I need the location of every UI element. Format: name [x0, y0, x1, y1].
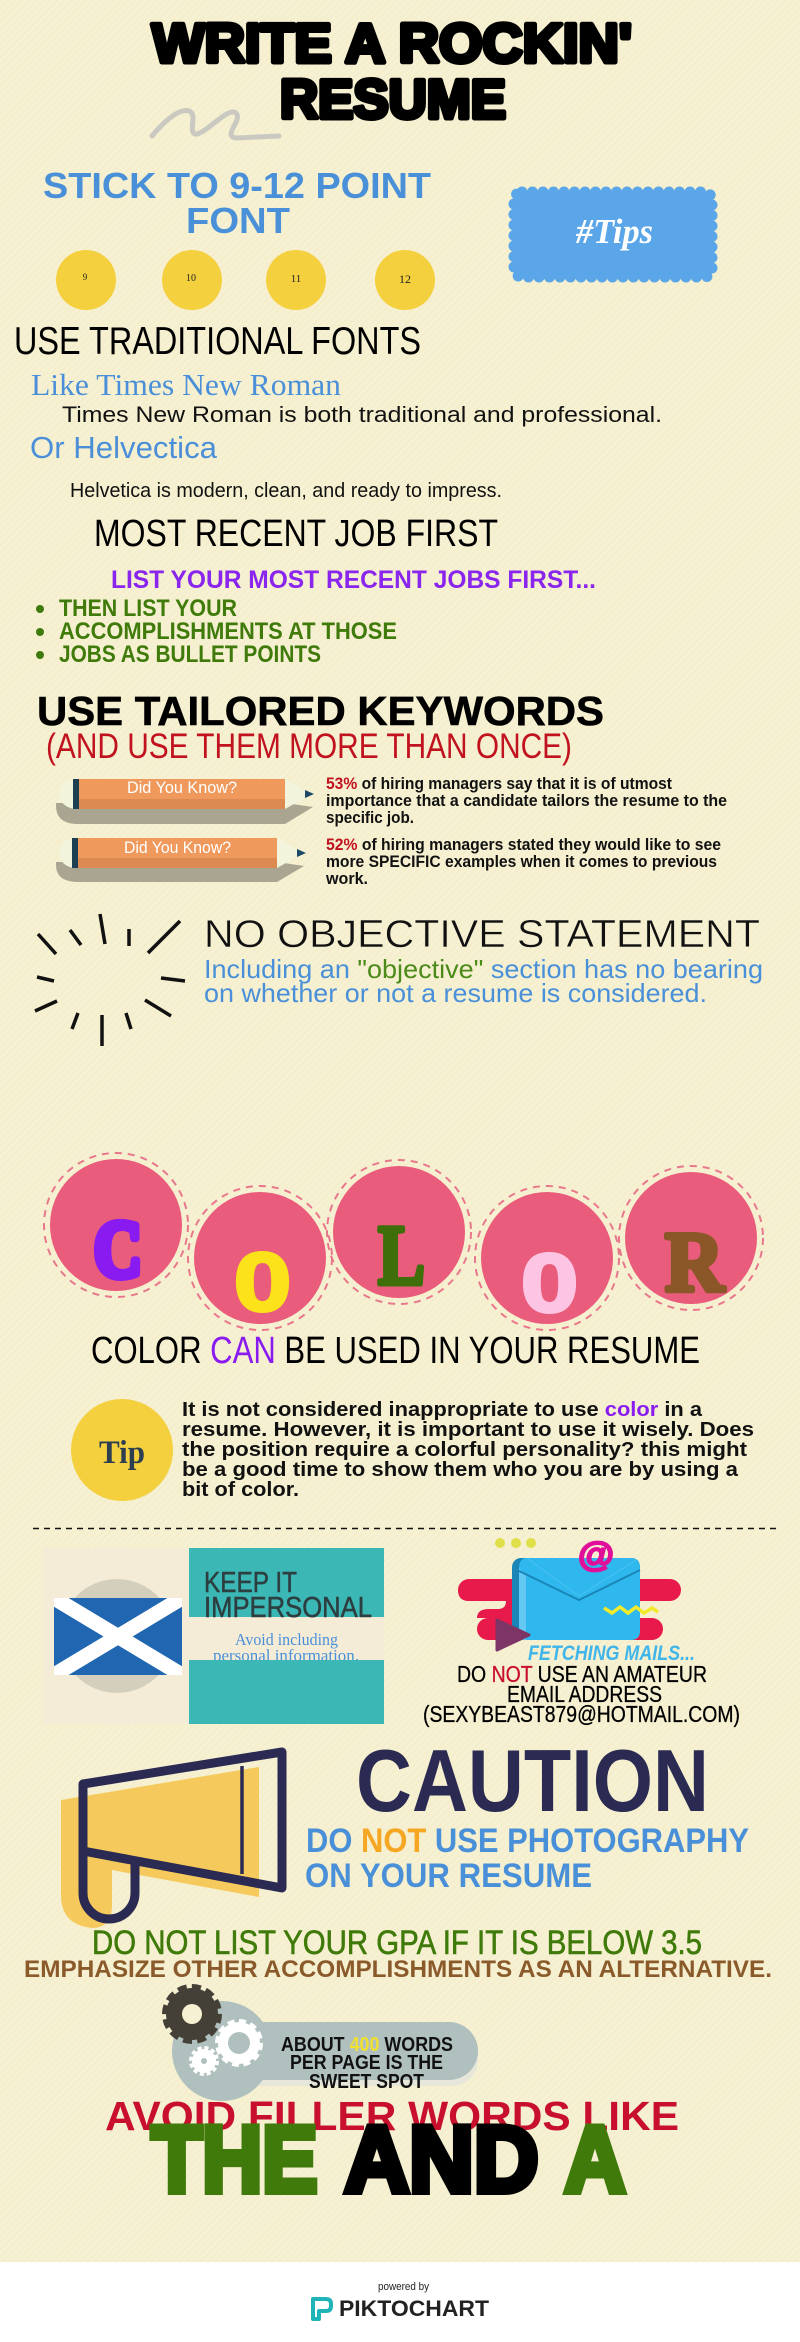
helvetica description: Helvetica is modern, clean, and ready to impress.: [70, 480, 502, 502]
tip paragraph: the position require a colorful personality? this might: [182, 1439, 747, 1461]
font size circles: 11: [291, 273, 301, 285]
filler words: [152, 2106, 626, 2212]
font size circles: 10: [186, 273, 196, 284]
word count text: SWEET SPOT: [309, 2071, 424, 2093]
color letters: O: [236, 1238, 289, 1326]
panel: keep it impersonal: KEEP IT: [204, 1567, 297, 1599]
footer: powered by: [378, 2281, 429, 2293]
color circles: [44, 1153, 763, 1330]
title: RESUME: [280, 68, 506, 130]
filler words: THE: [152, 2106, 318, 2212]
tip paragraph: bit of color.: [182, 1479, 299, 1501]
fact 1: [326, 774, 727, 827]
heading: no objective statement: NO OBJECTIVE STATEMENT: [204, 913, 760, 956]
color letters: C: [94, 1206, 142, 1294]
email advice: DO NOT USE AN AMATEUR: [457, 1661, 707, 1687]
fact 2: work.: [325, 869, 368, 888]
fact 1: specific job.: [326, 808, 414, 827]
heading: font size: STICK TO 9-12 POINT: [43, 165, 431, 206]
heading: font size: FONT: [186, 200, 290, 241]
tip paragraph: resume. However, it is important to use it wisely. Does: [182, 1419, 754, 1441]
footer: [0, 2262, 800, 2342]
color letters: R: [665, 1214, 725, 1310]
font size circles: 12: [399, 272, 411, 286]
heading: most recent job: MOST RECENT JOB FIRST: [94, 513, 498, 555]
icon: sunburst: [35, 914, 185, 1046]
times new roman description: Times New Roman is both traditional and professional.: [62, 402, 662, 427]
panel: keep it impersonal: personal information.: [213, 1646, 359, 1665]
color letters: [94, 1206, 725, 1327]
pencil 1: Did You Know?: [127, 778, 237, 797]
icon: gears key: [165, 1987, 478, 2101]
photography warning: DO NOT USE PHOTOGRAPHY: [306, 1822, 749, 1860]
panel: keep it impersonal: [43, 1548, 384, 1724]
purple sub-heading: LIST YOUR MOST RECENT JOBS FIRST...: [111, 566, 596, 594]
color letters: L: [378, 1207, 425, 1303]
heading: caution: CAUTION: [356, 1731, 709, 1830]
objective description: on whether or not a resume is considered.: [204, 978, 707, 1008]
heading: font size: [43, 165, 431, 241]
bullet list: THEN LIST YOUR: [59, 595, 237, 622]
panel: keep it impersonal: Avoid including: [235, 1630, 338, 1649]
word count text: ABOUT 400 WORDS: [281, 2034, 453, 2056]
icon: flag: [54, 1598, 182, 1675]
tips badge: #Tips: [575, 212, 653, 251]
icon: megaphone: [61, 1752, 282, 1928]
fact 2: 52% of hiring managers stated they would like to see: [326, 835, 721, 854]
bullet list: JOBS AS BULLET POINTS: [59, 641, 321, 668]
filler words heading: AVOID FILLER WORDS LIKE: [105, 2093, 679, 2139]
email advice: (SEXYBEAST879@HOTMAIL.COM): [423, 1701, 740, 1727]
helvetica line: Or Helvectica: [30, 430, 218, 465]
piktochart logo: [313, 2299, 331, 2319]
color letters: O: [523, 1239, 576, 1327]
icon: email envelope: @: [578, 1536, 614, 1574]
fact 1: importance that a candidate tailors the resume to the: [326, 791, 727, 810]
heading: tailored keywords: USE TAILORED KEYWORDS: [37, 688, 604, 734]
bullet list: ACCOMPLISHMENTS AT THOSE: [59, 618, 397, 645]
pencil 1: [56, 778, 314, 824]
filler words: AND: [344, 2106, 538, 2212]
icon: email envelope: [458, 1536, 681, 1650]
font size circles: 9: [83, 272, 88, 282]
fact 1: 53% of hiring managers say that it is of utmost: [326, 774, 672, 793]
word count text: [281, 2034, 453, 2093]
objective description: [204, 954, 763, 1008]
title: [152, 12, 632, 130]
tip paragraph: [182, 1399, 754, 1501]
pencil 2: [56, 838, 306, 882]
red sub-heading: (AND USE THEM MORE THAN ONCE): [46, 727, 572, 766]
squiggle decoration: [152, 111, 279, 138]
fetching mails label: FETCHING MAILS...: [528, 1642, 695, 1665]
font size circles: [56, 250, 435, 310]
pencil 2: Did You Know?: [124, 838, 231, 857]
gpa heading: DO NOT LIST YOUR GPA IF IT IS BELOW 3.5: [92, 1924, 702, 1962]
photography warning: [305, 1822, 749, 1895]
email advice: EMAIL ADDRESS: [507, 1681, 662, 1707]
gpa sub-heading: EMPHASIZE OTHER ACCOMPLISHMENTS AS AN ALTERNATIVE.: [24, 1956, 772, 1983]
fact 2: [325, 835, 721, 888]
email advice: [423, 1661, 740, 1727]
times new roman line: Like Times New Roman: [31, 367, 342, 402]
bullet list: [36, 595, 397, 668]
word count text: PER PAGE IS THE: [290, 2052, 443, 2074]
photography warning: ON YOUR RESUME: [305, 1857, 592, 1895]
footer: PIKTOCHART: [339, 2296, 490, 2321]
tip paragraph: It is not considered inappropriate to use color in a: [182, 1399, 703, 1421]
filler words: A: [564, 2106, 626, 2212]
title: WRITE A ROCKIN': [152, 12, 632, 74]
panel: keep it impersonal: IMPERSONAL: [204, 1592, 372, 1624]
objective description: Including an "objective" section has no bearing: [204, 954, 763, 984]
heading: traditional fonts: USE TRADITIONAL FONTS: [14, 320, 421, 363]
tips badge: [514, 192, 712, 277]
tip badge: [71, 1399, 173, 1501]
tip paragraph: be a good time to show them who you are by using a: [182, 1459, 739, 1481]
fact 2: more SPECIFIC examples when it comes to previous: [326, 852, 717, 871]
tip badge: Tip: [99, 1435, 145, 1471]
heading: color can be used: COLOR CAN BE USED IN YOUR RESUME: [91, 1330, 700, 1372]
